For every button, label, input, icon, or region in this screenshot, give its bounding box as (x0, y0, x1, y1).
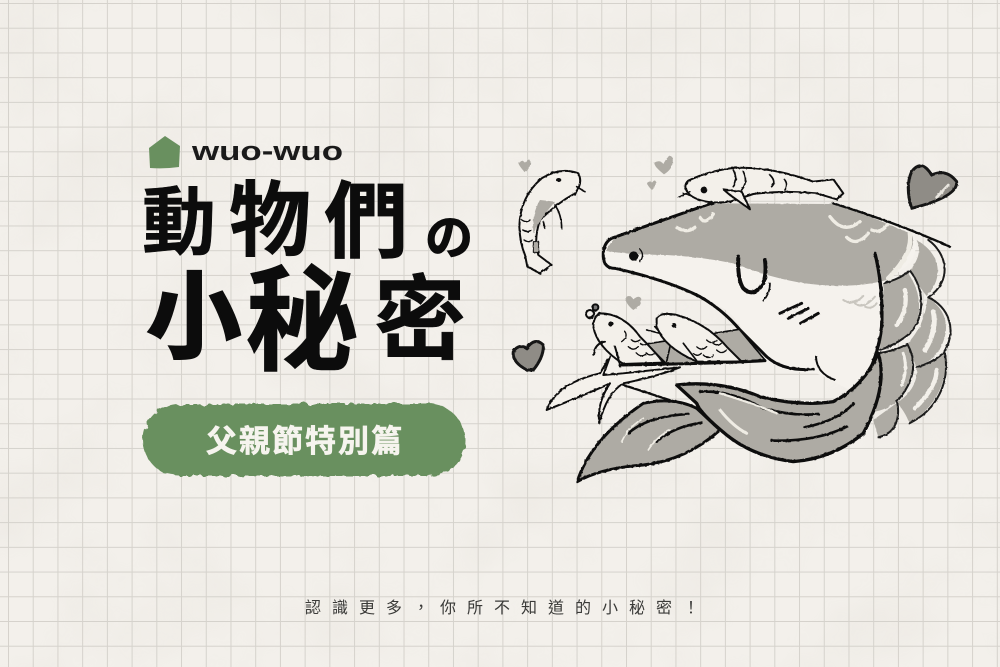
title: 小 (147, 242, 241, 378)
rear fin streaks (622, 414, 702, 450)
logo wordmark: wuo-wuo (191, 136, 343, 166)
rear fin (577, 401, 720, 482)
whale head (603, 203, 916, 393)
title: 動 (142, 163, 216, 270)
whale eye (629, 251, 638, 261)
icon: heart highlight (937, 185, 948, 197)
title: 密 (374, 246, 466, 379)
jaw line (620, 361, 765, 365)
illustration: whale and fish (513, 156, 957, 482)
icon: green house (149, 136, 180, 168)
scale outlines (878, 240, 951, 437)
icon: large heart (908, 166, 957, 208)
title: 們 (324, 155, 408, 276)
badge text: 父親節特別篇 (206, 416, 404, 461)
title (142, 154, 473, 394)
title: の (425, 198, 473, 268)
cheek marks (843, 296, 877, 308)
whale outline (603, 203, 950, 383)
title: 秘 (245, 229, 359, 394)
badge background (143, 404, 465, 476)
tail fluke (677, 353, 881, 462)
back highlights (677, 214, 910, 278)
subtitle badge (143, 404, 465, 476)
mouth interior (647, 329, 765, 364)
title: 物 (229, 154, 311, 273)
footer text: 認識更多，你所不知道的小秘密！ (305, 594, 710, 618)
fish in mouth: right (647, 314, 742, 362)
whale scales (873, 240, 951, 437)
icon: small grey hearts (518, 156, 673, 310)
hearts (513, 156, 957, 370)
pectoral fins (547, 357, 700, 423)
fish in mouth: left (586, 304, 663, 367)
logo (149, 136, 343, 168)
left fish (519, 171, 585, 273)
scale highlights (897, 257, 949, 408)
scale fills (873, 240, 946, 437)
whale grey back (606, 203, 914, 286)
icon: left heart (513, 342, 543, 370)
top fish (678, 168, 843, 209)
tail details (700, 392, 853, 441)
